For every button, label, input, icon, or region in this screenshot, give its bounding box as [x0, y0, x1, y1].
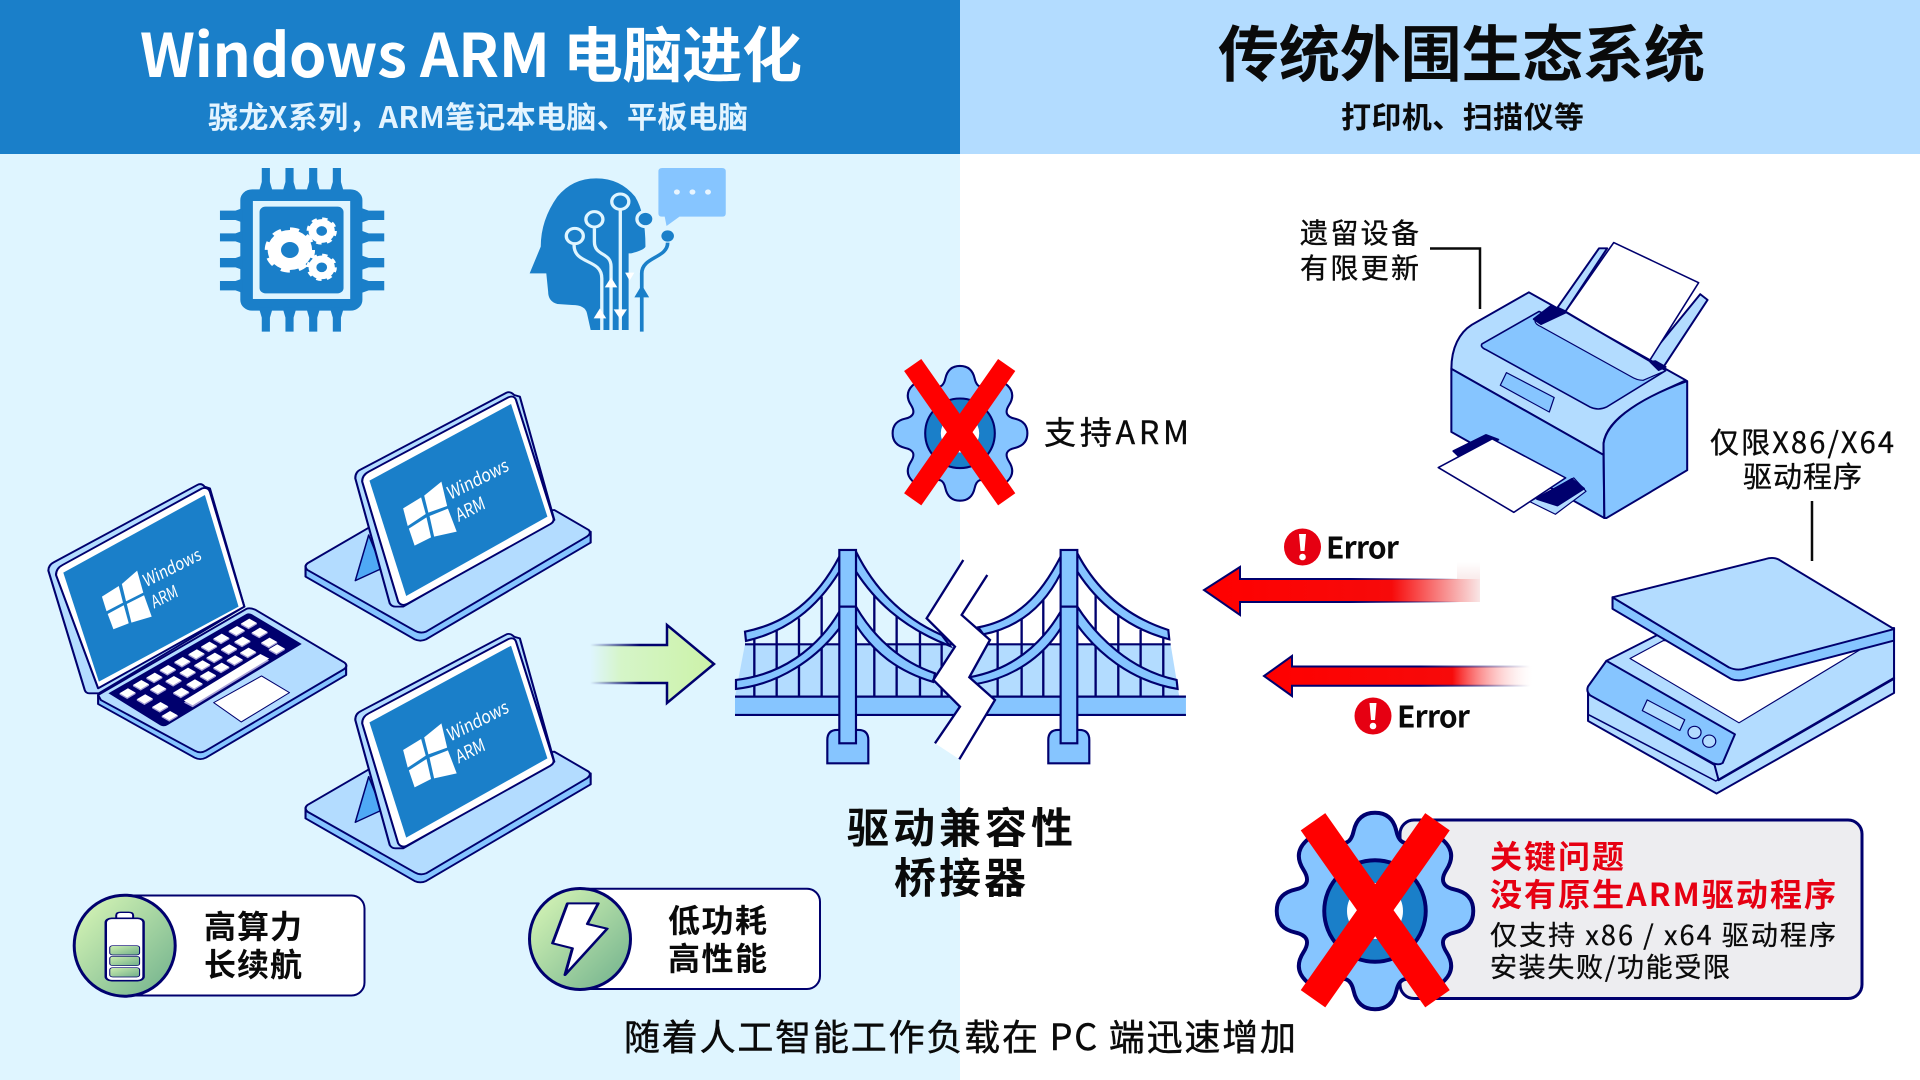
- heading: driver compatibility bridge: [847, 795, 1073, 906]
- icon: battery: [106, 912, 144, 981]
- left header band: 骁龙X系列，ARM笔记本电脑、平板电脑: [208, 93, 748, 137]
- scanner: [1587, 558, 1894, 794]
- badge: low power, high performance: 低功耗: [668, 896, 767, 942]
- error badge, bottom: [1354, 692, 1471, 736]
- error badge, top: Error: [1326, 524, 1400, 568]
- callout: key problem: 仅支持 x86 / x64 驱动程序: [1490, 914, 1836, 953]
- callout: key problem: [1277, 813, 1862, 1009]
- label: legacy devices with leader line: [1300, 212, 1480, 309]
- printer: [1438, 243, 1708, 518]
- badge: high compute, long battery: [74, 895, 364, 996]
- arrow: red, error from printer: [1204, 562, 1480, 615]
- right header band: 打印机、扫描仪等: [1341, 93, 1584, 137]
- left header band: [0, 0, 960, 154]
- tablet with stand, bottom: Windows: [443, 693, 512, 747]
- icon: large gear crossed out: [1277, 813, 1473, 1009]
- right header band: 传统外围生态系统: [1218, 5, 1705, 94]
- footer caption: 随着人工智能工作负载在 PC 端迅速增加: [624, 1009, 1296, 1061]
- left header band: Windows ARM 电脑进化: [140, 8, 802, 95]
- tablet with stand, bottom: ARM: [452, 731, 488, 769]
- heading: driver compatibility bridge: 驱动兼容性: [847, 795, 1073, 856]
- icon: processor chip with gears: [220, 168, 384, 332]
- label: legacy devices with leader line: 遗留设备: [1300, 212, 1419, 252]
- icon: AI head with circuits and speech bubble: [530, 168, 726, 332]
- label: x86/x64 only driver with leader line: 仅限X86/X64: [1710, 420, 1894, 462]
- tablet with stand, bottom: [306, 634, 591, 882]
- callout: key problem: 安装失败/功能受限: [1490, 946, 1730, 985]
- icon: lightning bolt: [553, 903, 607, 975]
- heading: driver compatibility bridge: 桥接器: [894, 845, 1026, 906]
- left panel background: [0, 154, 960, 1080]
- icon: gear crossed out, no ARM support: [893, 365, 1027, 501]
- badge: low power, high performance: [530, 888, 820, 990]
- label: legacy devices with leader line: 有限更新: [1300, 247, 1419, 287]
- badge: high compute, long battery: 长续航: [204, 940, 302, 986]
- arrow: red, error from scanner: [1264, 656, 1533, 696]
- tablet with stand, top: [306, 392, 591, 641]
- callout: key problem: 没有原生ARM驱动程序: [1490, 870, 1836, 916]
- error badge, bottom: Error: [1397, 692, 1471, 736]
- arrow: green, devices to bridge: [590, 625, 714, 703]
- callout: key problem: 关键问题: [1490, 832, 1624, 878]
- label: x86/x64 only driver with leader line: [1710, 420, 1894, 561]
- badge: high compute, long battery: 高算力: [204, 902, 302, 948]
- badge: low power, high performance: 高性能: [668, 934, 767, 980]
- broken bridge: [735, 550, 1186, 763]
- tablet with stand, top: ARM: [452, 489, 488, 527]
- error badge, top: [1284, 524, 1400, 568]
- tablet with stand, top: Windows: [443, 451, 512, 505]
- laptop: [48, 484, 346, 759]
- label: x86/x64 only driver with leader line: 驱动程序: [1743, 454, 1862, 496]
- laptop: Windows: [139, 541, 204, 593]
- laptop: ARM: [147, 578, 181, 614]
- label: ARM support: 支持ARM: [1044, 408, 1189, 454]
- speech bubble: [658, 168, 726, 226]
- right header band: [960, 0, 1920, 154]
